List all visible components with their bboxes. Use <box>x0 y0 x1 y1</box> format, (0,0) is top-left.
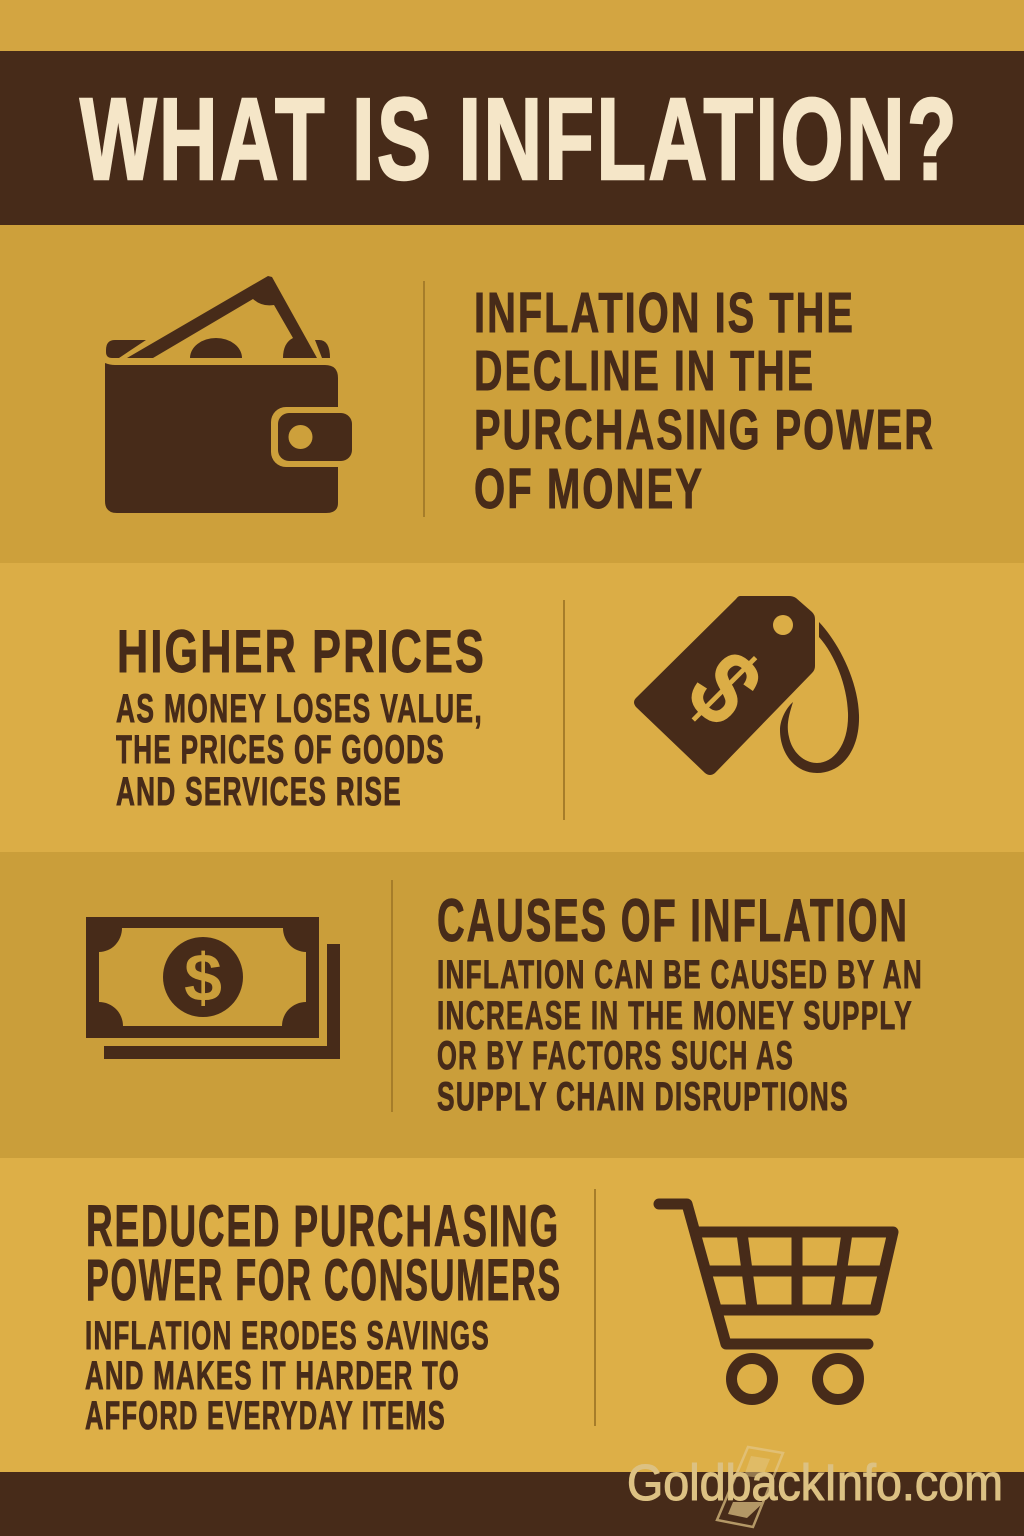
reduced purchasing power text <box>85 1314 490 1438</box>
heading: reduced purchasing power: POWER FOR CONSUMERS <box>86 1248 562 1313</box>
heading: reduced purchasing power <box>86 1194 562 1313</box>
reduced purchasing power text: AND MAKES IT HARDER TO <box>85 1354 460 1398</box>
icon: price tag: $ <box>665 628 785 748</box>
heading: higher prices: HIGHER PRICES <box>117 618 486 685</box>
definition text: OF MONEY <box>474 457 704 521</box>
icon: banknotes <box>86 917 340 1059</box>
definition text: DECLINE IN THE <box>474 339 815 403</box>
header: title banner <box>0 51 1024 225</box>
panel: reduced purchasing power <box>0 1158 1024 1472</box>
icon: tilted goldback note <box>717 1447 783 1527</box>
higher prices text: AS MONEY LOSES VALUE, <box>116 687 483 731</box>
icon: banknotes: $ <box>184 940 222 1016</box>
icon: shopping cart <box>659 1204 893 1400</box>
panel: causes of inflation <box>0 852 1024 1158</box>
icon: price tag <box>634 596 859 775</box>
footer band <box>0 1472 1024 1536</box>
causes text <box>437 953 923 1119</box>
definition text <box>474 281 935 521</box>
panel: higher prices <box>0 563 1024 852</box>
higher prices text <box>116 687 483 814</box>
definition text: INFLATION IS THE <box>474 281 855 345</box>
icon: wallet <box>105 276 361 513</box>
heading: reduced purchasing power: REDUCED PURCHASING <box>86 1194 560 1259</box>
reduced purchasing power text: INFLATION ERODES SAVINGS <box>85 1314 490 1358</box>
higher prices text: AND SERVICES RISE <box>116 770 402 814</box>
higher prices text: THE PRICES OF GOODS <box>116 728 445 772</box>
reduced purchasing power text: AFFORD EVERYDAY ITEMS <box>85 1394 446 1438</box>
watermark: GoldbackInfo.com <box>627 1447 1003 1527</box>
panel: definition <box>0 225 1024 563</box>
causes text: OR BY FACTORS SUCH AS <box>437 1034 794 1078</box>
